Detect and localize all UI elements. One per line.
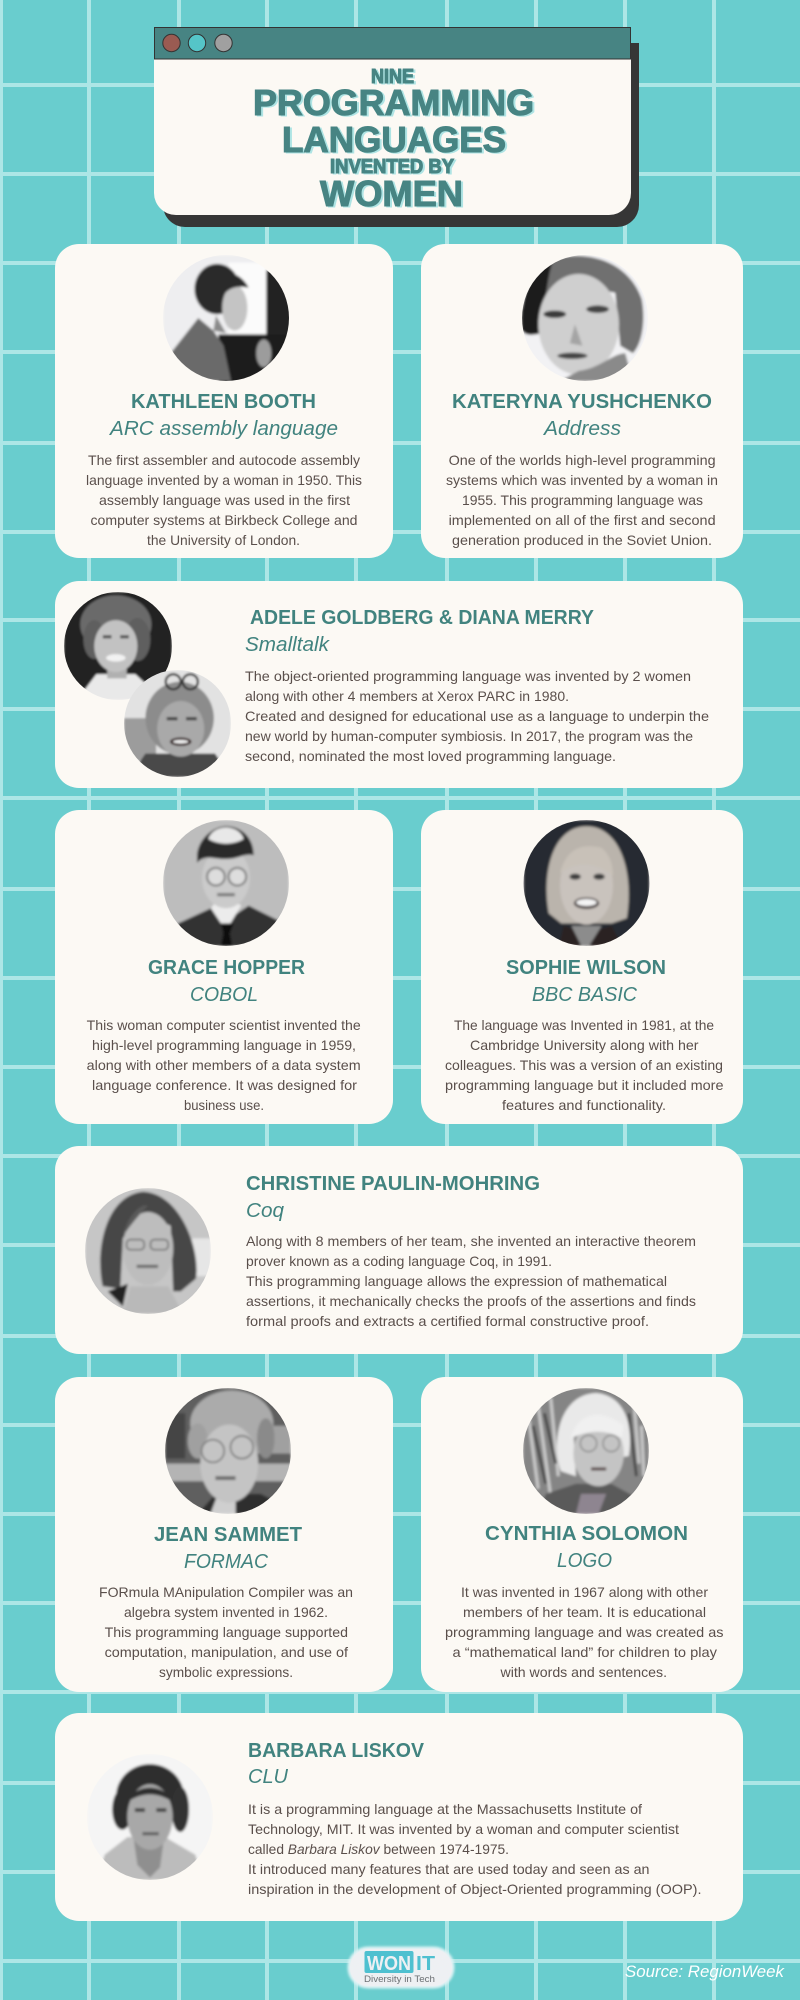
description: high-level programming language in 1959, <box>92 1037 356 1053</box>
description <box>445 1017 724 1113</box>
description: This programming language supported <box>105 1624 348 1640</box>
panel: Jean Sammet <box>55 1377 393 1692</box>
language: CLU <box>248 1766 289 1788</box>
logo: WON IT Diversity in Tech <box>349 1948 453 1987</box>
panel: Kathleen Booth <box>55 244 393 558</box>
portrait: Kathleen Booth <box>163 255 292 385</box>
description <box>445 1584 724 1680</box>
description: assertions, it mechanically checks the proofs of the assertions and finds <box>246 1293 696 1309</box>
description: It is a programming language at the Massachusetts Institute of <box>248 1801 642 1817</box>
description: The object-oriented programming language was invented by 2 women <box>245 668 691 684</box>
language: FORMAC <box>184 1551 269 1573</box>
description: FORmula MAnipulation Compiler was an <box>99 1584 353 1600</box>
description: The first assembler and autocode assembly <box>88 452 360 468</box>
title: INVENTED BY <box>330 156 455 178</box>
description <box>246 1233 696 1329</box>
description: generation produced in the Soviet Union. <box>452 532 712 548</box>
description: The language was Invented in 1981, at the <box>454 1017 714 1033</box>
name: JEAN SAMMET <box>154 1524 302 1546</box>
panel: Grace Hopper <box>55 810 393 1124</box>
description <box>86 452 362 548</box>
portrait: Kateryna Yushchenko <box>522 255 648 381</box>
description: the University of London. <box>147 532 300 548</box>
description: business use. <box>184 1097 264 1113</box>
description: Created and designed for educational use as a language to underpin the <box>245 708 709 724</box>
description: prover known as a coding language Coq, in 1991. <box>246 1253 552 1269</box>
portrait: Adele Goldberg <box>64 592 172 700</box>
description: This woman computer scientist invented the <box>87 1017 361 1033</box>
language: Address <box>543 418 621 440</box>
title: PROGRAMMING <box>253 82 534 123</box>
portrait: Christine Paulin-Mohring <box>85 1188 211 1314</box>
language: COBOL <box>190 984 258 1006</box>
description: formal proofs and extracts a certified formal constructive proof. <box>246 1313 649 1329</box>
logo: WON IT Diversity in Tech: Diversity in Tech <box>364 1974 435 1985</box>
panel: Kateryna Yushchenko <box>421 244 743 558</box>
description: new world by human-computer symbiosis. In 2017, the program was the <box>245 728 693 744</box>
description: called Barbara Liskov between 1974-1975. <box>248 1841 509 1857</box>
description: language conference. It was designed for <box>92 1077 357 1093</box>
description: members of her team. It is educational <box>463 1604 706 1620</box>
portrait: Barbara Liskov <box>102 1762 198 1880</box>
portrait: Jean Sammet <box>165 1388 291 1514</box>
title: WOMEN <box>320 173 463 214</box>
language: ARC assembly language <box>109 418 338 440</box>
description <box>245 668 709 764</box>
panel: Christine Paulin-Mohring <box>55 1146 743 1354</box>
description: along with other 4 members at Xerox PARC in 1980. <box>245 688 569 704</box>
portrait: Grace Hopper <box>163 820 289 946</box>
name: CYNTHIA SOLOMON <box>485 1523 688 1545</box>
description: implemented on all of the first and second <box>449 512 716 528</box>
portrait: Cynthia Solomon <box>523 1388 649 1514</box>
description: language invented by a woman in 1950. This <box>86 472 362 488</box>
portrait: Diana Merry <box>124 670 231 777</box>
logo: WON IT Diversity in Tech: IT <box>416 1953 435 1975</box>
description: assembly language was used in the first <box>99 492 350 508</box>
description: Technology, MIT. It was invented by a woman and computer scientist <box>248 1821 679 1837</box>
panel: Cynthia Solomon <box>421 1377 743 1692</box>
language: Coq <box>246 1200 284 1222</box>
source note: Source: RegionWeek <box>625 1962 785 1981</box>
title: NINE <box>371 66 414 88</box>
description: symbolic expressions. <box>159 1664 293 1680</box>
description: features and functionality. <box>502 1097 666 1113</box>
name: ADELE GOLDBERG & DIANA MERRY <box>250 607 595 629</box>
description: It was invented in 1967 along with other <box>461 1584 708 1600</box>
language: BBC BASIC <box>532 984 638 1006</box>
panel: Adele Goldberg and Diana Merry <box>55 581 743 788</box>
logo: WON IT Diversity in Tech: WON <box>367 1953 411 1975</box>
description <box>99 1584 353 1680</box>
description: second, nominated the most loved programming language. <box>245 748 616 764</box>
name: CHRISTINE PAULIN-MOHRING <box>246 1173 540 1195</box>
panel: Sophie Wilson <box>421 810 743 1124</box>
window title bar <box>154 28 630 59</box>
name: GRACE HOPPER <box>148 957 306 979</box>
language: Smalltalk <box>245 634 330 656</box>
name: SOPHIE WILSON <box>506 957 666 979</box>
description: a “mathematical land” for children to play <box>452 1644 717 1660</box>
title window <box>154 27 639 227</box>
portrait: Sophie Wilson <box>524 820 650 946</box>
language: LOGO <box>557 1550 612 1572</box>
description: with words and sentences. <box>499 1664 667 1680</box>
description: Along with 8 members of her team, she invented an interactive theorem <box>246 1233 696 1249</box>
name: KATHLEEN BOOTH <box>131 391 316 413</box>
description: computer systems at Birkbeck College and <box>90 512 358 528</box>
description: inspiration in the development of Object-Oriented programming (OOP). <box>248 1881 702 1897</box>
title <box>253 66 534 214</box>
description <box>248 1801 702 1897</box>
description: algebra system invented in 1962. <box>124 1604 328 1620</box>
description: along with other members of a data system <box>87 1057 361 1073</box>
description: This programming language allows the expression of mathematical <box>246 1273 667 1289</box>
panel: Barbara Liskov <box>55 1713 743 1921</box>
name: BARBARA LISKOV <box>248 1740 425 1762</box>
description: One of the worlds high-level programming <box>449 452 716 468</box>
description: colleagues. This was a version of an existing <box>445 1057 723 1073</box>
description: systems which was invented by a woman in <box>446 472 718 488</box>
description: It introduced many features that are used today and seen as an <box>248 1861 650 1877</box>
description: programming language and was created as <box>445 1624 724 1640</box>
description: computation, manipulation, and use of <box>105 1644 348 1660</box>
description: programming language but it included more <box>445 1077 724 1093</box>
description <box>446 452 718 548</box>
description: Cambridge University along with her <box>470 1037 699 1053</box>
title: LANGUAGES <box>282 119 506 160</box>
description: 1955. This programming language was <box>462 492 703 508</box>
description <box>87 1017 361 1113</box>
name: KATERYNA YUSHCHENKO <box>452 391 712 413</box>
